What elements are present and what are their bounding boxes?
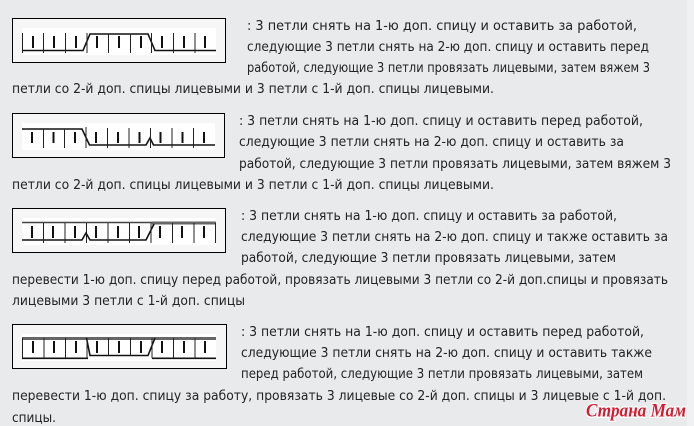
text block: description 1: следующие 3 петли снять на 2-ю доп. спицу и оставить перед xyxy=(247,39,649,55)
text block: description 3: : 3 петли снять на 1-ю доп. спицу и оставить за работой, xyxy=(241,208,617,224)
text block: description 1: петли со 2-й доп. спицы лицевыми и 3 петли с 1-й доп. спицы лицевыми. xyxy=(12,81,494,97)
text block: description 4: следующие 3 петли снять на 2-ю доп. спицу и оставить также xyxy=(241,345,652,361)
panel: cable chart 4 xyxy=(12,324,226,368)
text block: description 3 xyxy=(12,208,668,309)
text block: description 1 xyxy=(12,18,650,97)
panel: cable chart 3 xyxy=(12,208,226,252)
text block: description 1: : 3 петли снять на 1-ю доп. спицу и оставить за работой, xyxy=(247,18,637,34)
text block: description 4: : 3 петли снять на 1-ю доп. спицу и оставить перед работой, xyxy=(241,324,644,340)
watermark: Страна Мам xyxy=(586,400,686,422)
panel: cable chart 1 xyxy=(12,18,226,62)
text block: description 4: перед работой, следующие 3 петли провязать лицевыми, затем xyxy=(241,366,643,382)
text block: description 2: петли со 2-й доп. спицы лицевыми и 3 петли с 1-й доп. спицы лицевыми. xyxy=(12,177,494,193)
text block: description 2 xyxy=(12,113,671,193)
text block: description 2: следующие 3 петли снять на 2-ю доп. спицу и оставить за xyxy=(239,134,624,150)
panel: cable chart 2 xyxy=(12,114,224,158)
text block: description 2: : 3 петли снять на 1-ю доп. спицу и оставить перед работой, xyxy=(239,113,643,129)
text block: description 3: лицевыми 3 петли с 1-й доп. спицы xyxy=(12,293,245,309)
text block: description 4: спицы. xyxy=(12,410,56,426)
text block: description 3: работой, следующие 3 петли провязать лицевыми, затем xyxy=(241,250,616,266)
text block: description 4 xyxy=(12,324,666,426)
